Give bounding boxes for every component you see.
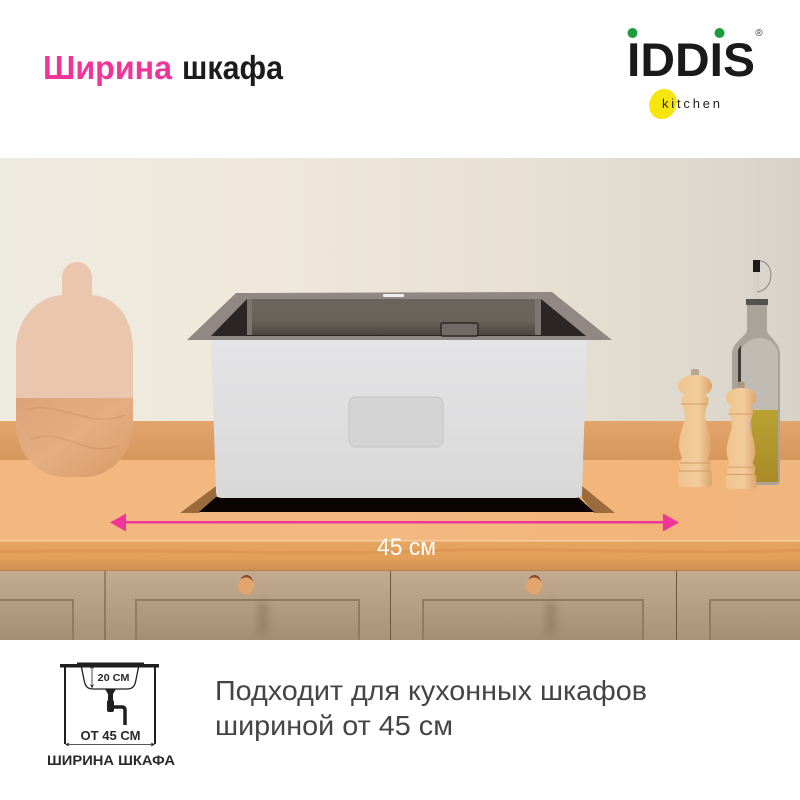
description text: Подходит для кухонных шкафов <box>215 675 647 706</box>
sink <box>180 292 615 513</box>
cutout and flaps <box>180 486 217 513</box>
bottle <box>732 260 780 485</box>
cabinet diagram icon <box>60 662 159 746</box>
pepper mill small <box>726 382 756 489</box>
cabinet diagram icon: 20 СМ <box>98 673 130 684</box>
cabinet doors <box>0 570 800 640</box>
basin side strips <box>247 299 541 335</box>
pepper mill large <box>678 369 712 487</box>
title <box>43 49 284 86</box>
basin interior <box>211 299 586 336</box>
label plate <box>349 397 443 447</box>
logo: IDDIS kitchen <box>627 28 763 124</box>
logo: IDDIS kitchen: IDDIS <box>627 33 755 86</box>
rim <box>187 292 612 340</box>
title: Ширина <box>43 49 173 86</box>
kitchen scene <box>0 158 800 650</box>
wall <box>0 158 800 421</box>
backsplash <box>0 421 800 461</box>
cutting board <box>16 262 133 477</box>
logo: IDDIS kitchen: kitchen <box>662 96 720 111</box>
width arrow <box>110 514 679 532</box>
description text: шириной от 45 см <box>215 710 453 741</box>
logo: IDDIS kitchen: ® <box>755 28 763 39</box>
width label: 45 см <box>377 534 436 561</box>
knob right <box>526 575 542 594</box>
description text <box>215 675 647 741</box>
cabinet diagram icon: ОТ 45 СМ <box>80 729 140 743</box>
basin back wall <box>247 299 541 335</box>
title: шкафа <box>182 49 284 86</box>
sink body <box>211 340 587 498</box>
diagram caption: ШИРИНА ШКАФА <box>47 753 175 768</box>
overflow <box>441 323 478 336</box>
countertop edge <box>0 540 800 570</box>
countertop <box>0 460 800 541</box>
knob left <box>238 575 254 594</box>
